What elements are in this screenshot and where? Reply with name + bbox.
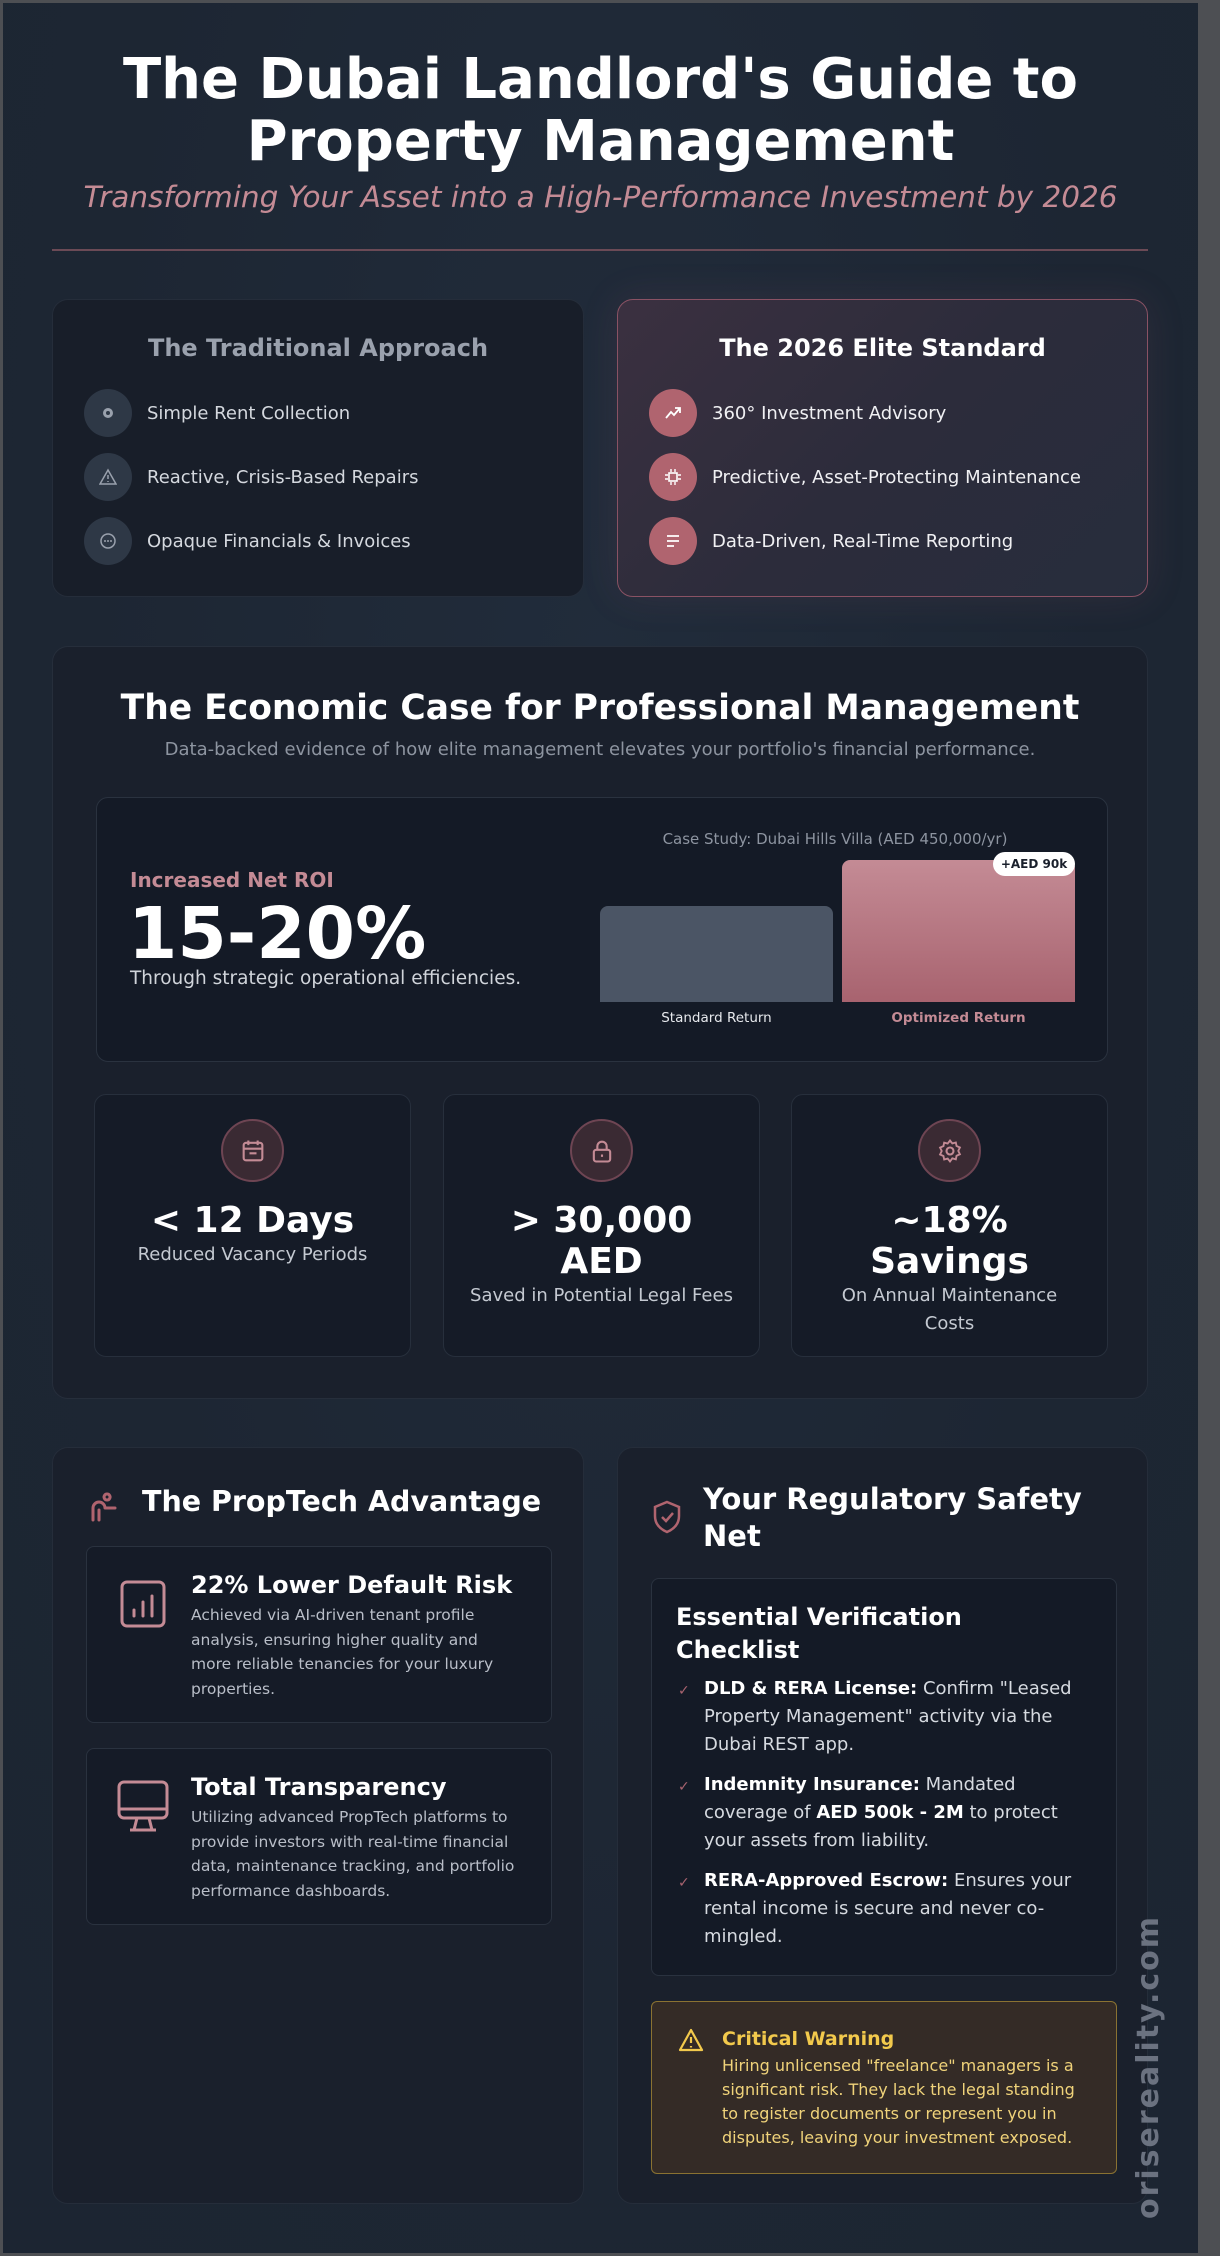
bar chart: Standard Return (661, 1010, 772, 1026)
heading: regulatory: Your Regulatory Safety Net (703, 1482, 1082, 1553)
bar chart (600, 830, 1075, 1026)
ROI value: 15-20% (128, 892, 426, 975)
item: advisory: 360° Investment Advisory (712, 402, 946, 424)
badge: +AED 90k (1001, 857, 1067, 871)
card: transparency: Utilizing advanced PropTech platforms to provide investors with real-time financial data, maintenance tracking, and portfolio performance dashboards. (191, 1808, 514, 1900)
checklist item: escrow: ✓ (678, 1875, 690, 1891)
stat: vacancy: < 12 Days (151, 1200, 354, 1241)
ROI label: Increased Net ROI (130, 868, 334, 892)
item: reporting (649, 517, 1013, 565)
stat: savings: ~18% (891, 1200, 1008, 1241)
bar chart: Case Study: Dubai Hills Villa (AED 450,000/yr) (663, 830, 1007, 848)
item: maintenance: Predictive, Asset-Protecting Maintenance (712, 466, 1081, 488)
item: repairs (84, 453, 418, 501)
checklist item: escrow: RERA-Approved Escrow: Ensures your rental income is secure and never co-mingled. (704, 1870, 1071, 1947)
checklist box: Essential Verification (676, 1603, 962, 1631)
panel: proptech (52, 1447, 584, 2204)
stat: vacancy (94, 1094, 411, 1357)
panel: elite standard (617, 299, 1148, 597)
badge (993, 852, 1075, 876)
stat: savings (791, 1094, 1108, 1357)
checklist item: license: DLD & RERA License: Confirm "Leased Property Management" activity via the Dubai REST app. (704, 1678, 1072, 1755)
checklist item: insurance: Indemnity Insurance: Mandated coverage of AED 500k - 2M to protect your assets from liability. (704, 1774, 1058, 1851)
card: default risk: Achieved via AI-driven tenant profile analysis, ensuring higher quality and more reliable tenancies for your luxury properties. (191, 1606, 493, 1698)
title: Property Management (247, 109, 954, 174)
item: maintenance (649, 453, 1081, 501)
watermark: orisereality.com (1131, 1915, 1166, 2219)
card: default risk: 22% Lower Default Risk (191, 1571, 512, 1599)
bar chart: Optimized Return (891, 1010, 1026, 1026)
card: transparency (86, 1748, 552, 1925)
subtitle: Transforming Your Asset into a High-Performance Investment by 2026 (83, 180, 1118, 214)
title: The Dubai Landlord's Guide to (123, 47, 1078, 112)
stat: legal fees (443, 1094, 760, 1357)
stat: legal fees: > 30,000 (511, 1200, 692, 1241)
stat: savings: On Annual Maintenance (842, 1285, 1057, 1306)
heading: economic case: The Economic Case for Professional Management (121, 688, 1079, 728)
heading: proptech: The PropTech Advantage (142, 1485, 541, 1518)
icon: shield (654, 1500, 680, 1534)
card: transparency: Total Transparency (191, 1773, 447, 1801)
stat: vacancy: Reduced Vacancy Periods (138, 1244, 367, 1265)
checklist box (651, 1578, 1117, 1976)
panel: economic case (52, 646, 1148, 1399)
checklist item: insurance: ✓ (678, 1779, 690, 1795)
ROI box (96, 797, 1108, 1062)
heading: elite: The 2026 Elite Standard (719, 334, 1046, 362)
item: reporting: Data-Driven, Real-Time Reporting (712, 530, 1013, 552)
panel: regulatory (617, 1447, 1148, 2204)
item: financials (84, 517, 411, 565)
item: rent collection: Simple Rent Collection (147, 402, 350, 424)
item: rent collection (84, 389, 350, 437)
item: advisory (649, 389, 946, 437)
ROI description: Through strategic operational efficiencies. (130, 968, 521, 989)
item: repairs: Reactive, Crisis-Based Repairs (147, 466, 418, 488)
heading: traditional: The Traditional Approach (148, 334, 488, 362)
checklist item: license: ✓ (678, 1683, 690, 1699)
title (123, 47, 1078, 174)
subheading: Data-backed evidence of how elite management elevates your portfolio's financial performance. (165, 739, 1035, 760)
stat: legal fees: Saved in Potential Legal Fees (470, 1285, 733, 1306)
stat: legal fees: AED (560, 1241, 643, 1282)
icon: proptech (92, 1492, 116, 1522)
callout: critical warning: Critical Warning (722, 2028, 894, 2050)
callout: critical warning: Hiring unlicensed "freelance" managers is a significant risk. They lack the legal standing to register documents or represent you in disputes, leaving your investment exposed. (722, 2056, 1075, 2147)
stat: savings: Savings (870, 1241, 1029, 1282)
panel: traditional approach (52, 299, 584, 597)
callout: critical warning (651, 2001, 1117, 2174)
stat: savings: Costs (925, 1313, 974, 1334)
item: financials: Opaque Financials & Invoices (147, 530, 411, 552)
checklist box: Checklist (676, 1636, 799, 1664)
card: default risk (86, 1546, 552, 1723)
